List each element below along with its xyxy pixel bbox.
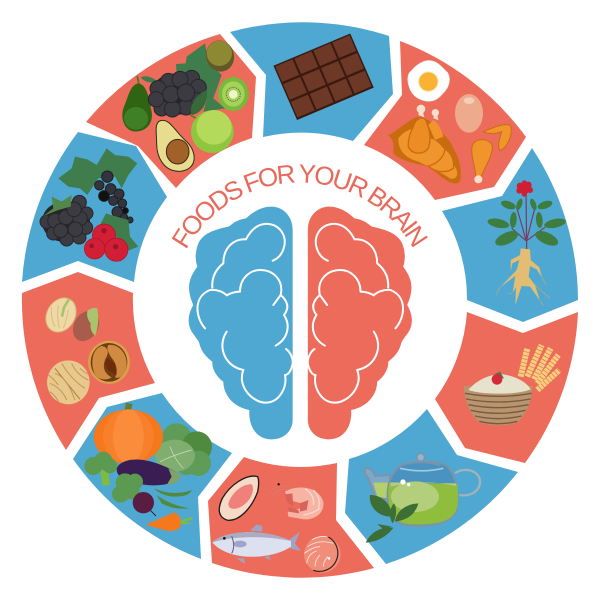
icon: avocado half [156,120,194,171]
icon: ginseng plant [487,180,567,305]
icon: raspberry [492,372,504,385]
icon: eggs and chicken group [388,61,511,183]
segment background [442,148,578,322]
convolution lines [308,224,403,403]
icon: porridge group [464,345,559,425]
brain: left hemisphere [189,207,293,439]
panel: eggs and chicken [364,41,526,200]
icon: seafood group [212,476,341,573]
segment background [86,34,256,188]
icon: nuts group [40,292,130,404]
icon: vegetables group [84,403,212,531]
icon: roast chicken [388,105,461,183]
icon: berry stars [89,228,118,249]
icon: bowl [464,386,532,425]
icon: lid knob [402,453,440,465]
icon: beet [133,492,156,516]
icon: spout tea [373,483,389,499]
panel: chocolate [230,22,393,141]
icon: fish [212,524,301,564]
icon: red flower [516,180,533,197]
panel: berries [22,132,167,282]
panel: seafood [208,457,374,578]
icon: teapot [365,453,480,543]
panel: green tea [345,409,518,564]
icon: carrot [146,513,193,531]
segment background [345,409,518,564]
icon: plant leaves [487,198,567,249]
icon: chicken wing [483,125,511,151]
segment background [22,132,167,282]
icon: chocolate bar [273,33,374,120]
icon: leaf [191,90,207,115]
icon: root [496,248,550,305]
icon: berries group [40,148,138,261]
icon: blackberry leaves [43,195,72,216]
panel: porridge and wheat [435,312,578,463]
icon: currants [95,171,133,223]
icon: currant leaves [58,148,137,195]
icon: porridge [468,374,531,394]
icon: kiwi half [218,77,249,111]
segment background [230,22,393,141]
icon: fruit group [122,37,249,171]
panel: vegetables [73,393,232,559]
icon: wheat [521,345,559,390]
icon: glass highlight [391,481,439,512]
icon: grapes [148,70,206,117]
icon: green apple [190,110,234,153]
icon: leaves [176,43,225,112]
segment background [364,41,526,200]
brain: right hemisphere [308,207,412,439]
icon: sparkles [400,479,410,486]
panel: ginseng [442,148,578,322]
convolution lines [197,224,293,403]
icon: broccoli [84,452,117,486]
icon: tea surface [391,482,456,487]
icon: whole walnut [47,360,90,404]
icon: whole avocado [122,76,157,132]
segment background [208,457,374,578]
icon: tea [388,482,458,525]
icon: cabbage [155,423,212,476]
panel: nuts [22,272,155,450]
icon: red berries [84,224,128,261]
icon: drumstick [472,140,492,183]
segment background [22,272,155,450]
icon: shelled nut [68,306,104,346]
icon: fried egg [408,61,449,101]
icon: egg [455,94,483,133]
icon: pumpkin [94,403,163,464]
icon: whole kiwi [202,37,238,75]
icon: handle [455,470,480,495]
hemisphere shape [189,207,293,439]
segment background [435,312,578,463]
icon: pistachio [40,292,82,338]
hemisphere shape [308,207,412,439]
icon: mussel [219,476,259,520]
segment background [73,393,232,559]
icon: blackberry [40,195,93,246]
panel: avocado, grapes and kiwi [86,34,256,188]
icon: eggplant [117,460,182,485]
icon: spout [365,468,390,500]
title: FOODS FOR YOUR BRAIN [172,164,428,248]
icon: lettuce [112,473,143,503]
icon: glass shine [400,468,443,471]
icon: tea leaves [366,495,418,543]
icon: salmon slice [304,536,341,573]
icon: body [388,462,458,526]
icon: walnut half [88,341,130,384]
icon: red berry leaves [101,213,138,251]
icon: pea pods [154,488,192,509]
icon: shrimp [267,483,323,519]
icon: stems [512,190,545,249]
